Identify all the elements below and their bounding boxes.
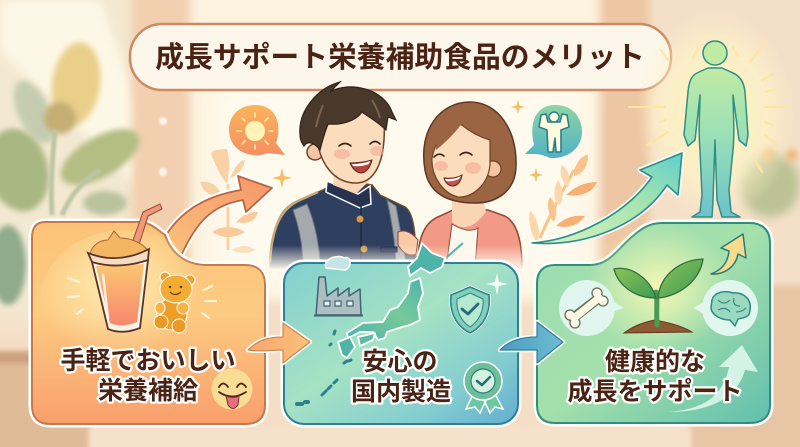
sparkle bbox=[486, 273, 508, 295]
person: smiling boy in school uniform bbox=[270, 82, 416, 268]
icon: smoothie cup bbox=[68, 204, 216, 332]
panel: easy and tasty nutrition bbox=[32, 176, 272, 424]
icon: muscle figure speech bubble bbox=[525, 105, 582, 158]
arrow: drink panel to boy bbox=[158, 176, 272, 258]
icon: gummy bear bbox=[154, 272, 195, 333]
sparkles bbox=[272, 100, 543, 188]
panel: healthy growth support bbox=[537, 222, 770, 423]
icon: sprout in soil bbox=[614, 259, 703, 333]
arrow: first to second panel bbox=[248, 323, 310, 363]
panel: made in Japan peace of mind bbox=[284, 243, 518, 424]
icon: brain in bubble bbox=[693, 280, 758, 336]
icon: quality ribbon badge bbox=[464, 362, 503, 413]
decorative leaves: right sprig bbox=[529, 155, 597, 240]
text: growth support: 成長をサポート bbox=[567, 378, 743, 406]
map: Japan bbox=[297, 243, 463, 404]
glowing human silhouette bbox=[629, 10, 795, 220]
person: smiling mother bbox=[262, 102, 532, 270]
icon: factory with smoke bbox=[314, 256, 363, 316]
text: peace of mind: 安心の bbox=[362, 348, 438, 376]
text: nutrition supplement: 栄養補給 bbox=[98, 377, 198, 405]
text: healthy: 健康的な bbox=[605, 348, 705, 376]
icon: sun speech bubble bbox=[229, 105, 285, 155]
decorative leaves: left sprig bbox=[200, 149, 258, 253]
text: easy and tasty: 手軽でおいしい bbox=[60, 347, 236, 375]
arrow: big growth arrow to figure bbox=[532, 153, 682, 243]
arrow: pale background up arrow bbox=[668, 345, 758, 412]
arrow: second to third panel bbox=[500, 322, 563, 363]
title banner: 成長サポート栄養補助食品のメリット bbox=[155, 42, 645, 74]
arrow: small yellow up arrow bbox=[711, 234, 746, 274]
icon: bone in bubble bbox=[559, 280, 624, 336]
text: domestic manufacturing: 国内製造 bbox=[351, 378, 451, 406]
title banner bbox=[130, 24, 671, 90]
icon: tongue out emoji bbox=[212, 368, 252, 410]
icon: safety shield bbox=[451, 287, 489, 333]
